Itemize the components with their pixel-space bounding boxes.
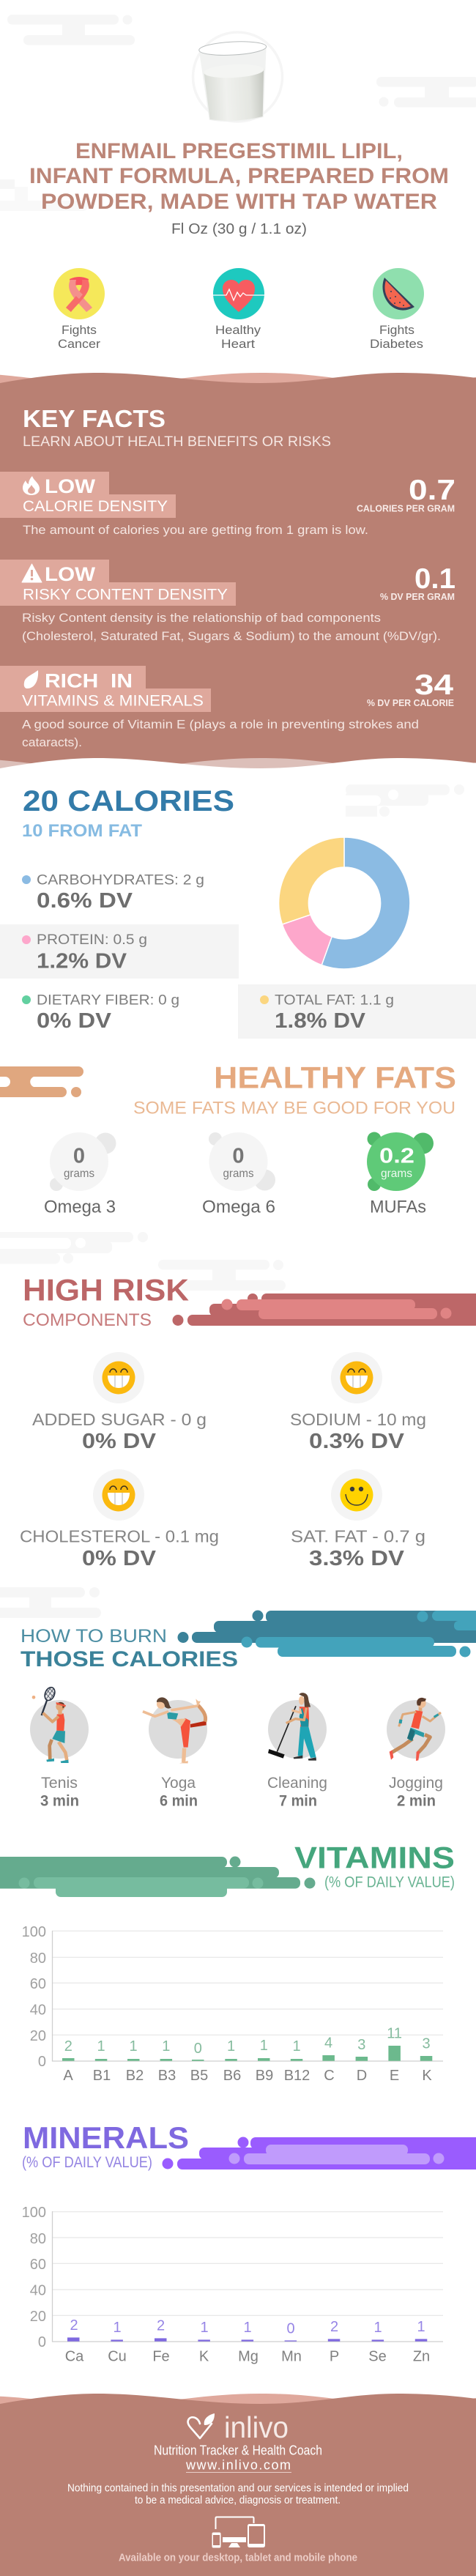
x axis labels: E <box>390 2068 399 2084</box>
bubble: omega 6: Omega 6 <box>202 1198 275 1217</box>
icon: devices <box>212 2517 265 2547</box>
subheading: components: COMPONENTS <box>23 1310 152 1330</box>
x axis labels: Fe <box>152 2348 170 2364</box>
heading: vitamins: VITAMINS <box>294 1841 455 1875</box>
icon: fights cancer <box>53 268 105 319</box>
y axis labels: 60 <box>30 2257 46 2273</box>
y axis labels: 0 <box>38 2334 46 2350</box>
text: calorie density description: The amount of calories you are getting from 1 gram is low. <box>23 524 368 537</box>
bar values: 1 <box>260 2038 268 2054</box>
x axis labels: B3 <box>158 2068 176 2084</box>
bar values <box>64 2026 431 2057</box>
activity: tennis <box>30 1686 89 1763</box>
background cloud: burn <box>0 1587 101 1618</box>
disclaimer: Nothing contained in this presentation and our services is intended or implied <box>67 2482 409 2495</box>
bubble: omega 6: grams <box>223 1168 253 1180</box>
label: yoga <box>160 1775 198 1810</box>
y axis labels: 80 <box>30 1950 46 1967</box>
macro: dietary fiber: DIETARY FIBER: 0 g <box>37 993 179 1009</box>
stat: calories per gram: CALORIES PER GRAM <box>357 502 455 514</box>
x axis labels: B9 <box>256 2068 273 2084</box>
label: tennis: Tenis <box>41 1775 78 1792</box>
bubble: MUFAs <box>367 1132 434 1217</box>
heading: how to burn those calories: THOSE CALORIES <box>21 1647 238 1671</box>
smiley: added sugar <box>93 1352 144 1403</box>
bar values: 1 <box>162 2038 170 2055</box>
title: ENFMAIL PREGESTIMIL LIPIL, <box>75 139 403 163</box>
y axis labels: 100 <box>22 1924 46 1940</box>
macro: carbohydrates: CARBOHYDRATES: 2 g <box>37 873 204 888</box>
text: cholesterol: CHOLESTEROL - 0.1 mg <box>20 1527 219 1546</box>
bubble: MUFAs: grams <box>381 1168 412 1180</box>
logo: inlivo: inlivo <box>224 2410 289 2444</box>
stat: percent DV per gram: 0.1 <box>414 563 455 595</box>
subheading: minerals percent of daily value: (% OF DAILY VALUE) <box>22 2154 152 2171</box>
panel: footer <box>0 2394 476 2576</box>
link: website: www.inlivo.com <box>185 2458 291 2473</box>
smiley: saturated fat <box>331 1469 382 1521</box>
bar values: 1 <box>200 2320 209 2336</box>
caption: availability: Available on your desktop, tablet and mobile phone <box>119 2552 357 2564</box>
activity: jogging <box>387 1698 445 1761</box>
subheading: healthy fats: SOME FATS MAY BE GOOD FOR YOU <box>133 1099 455 1118</box>
badge: rich in vitamins and minerals <box>0 666 211 712</box>
macro: carbohydrates <box>22 873 204 913</box>
text: sodium <box>290 1410 426 1453</box>
bar values <box>70 2317 425 2337</box>
label: yoga: Yoga <box>161 1775 196 1792</box>
y axis labels: 60 <box>30 1976 46 1992</box>
y axis labels: 80 <box>30 2231 46 2247</box>
label: cleaning: Cleaning <box>267 1775 327 1792</box>
panel: key facts <box>0 373 476 787</box>
y axis labels: 20 <box>30 2028 46 2044</box>
smiley: sodium <box>331 1352 382 1403</box>
x axis labels <box>65 2348 430 2364</box>
x axis labels: Zn <box>413 2348 430 2364</box>
banner: healthy fats <box>0 1066 83 1097</box>
label: jogging <box>389 1775 443 1810</box>
bar values: 2 <box>330 2319 338 2335</box>
bars <box>67 2337 427 2342</box>
label: fights cancer <box>58 323 100 351</box>
heading: healthy fats: HEALTHY FATS <box>214 1061 456 1095</box>
bar values: 2 <box>157 2318 165 2334</box>
chart: minerals <box>22 2205 443 2364</box>
subheading: calories from fat: 10 FROM FAT <box>22 821 142 841</box>
label: yoga: 6 min <box>160 1793 198 1810</box>
bar values: 0 <box>194 2041 202 2057</box>
label: jogging: 2 min <box>397 1793 436 1810</box>
y axis labels: 40 <box>30 2282 46 2298</box>
text: sodium: 0.3% DV <box>309 1430 405 1453</box>
x axis labels: Mg <box>238 2348 259 2364</box>
highlight bands for macros <box>0 924 476 1039</box>
x axis labels: A <box>63 2068 73 2084</box>
label: fights diabetes: Fights <box>379 323 414 337</box>
text: added sugar <box>32 1410 207 1453</box>
text: risky content description: Risky Content density is the relationship of bad components <box>22 612 381 625</box>
x axis labels: B5 <box>190 2068 208 2084</box>
bubble: omega 3: Omega 3 <box>44 1198 116 1217</box>
bar values: 1 <box>243 2320 252 2336</box>
background clouds: high risk <box>0 1232 286 1291</box>
x axis labels: B6 <box>223 2068 241 2084</box>
heading: key facts: KEY FACTS <box>23 405 166 432</box>
bar values: 3 <box>357 2037 365 2053</box>
bar values: 1 <box>292 2038 301 2055</box>
y axis labels: 0 <box>38 2054 46 2070</box>
stat: percent DV per calorie <box>367 669 454 708</box>
label: healthy heart: Heart <box>221 337 255 351</box>
macro: protein: 1.2% DV <box>37 950 127 973</box>
activity: cleaning <box>268 1693 327 1761</box>
bubble: omega 3: grams <box>64 1168 94 1180</box>
text: sodium: SODIUM - 10 mg <box>290 1410 426 1429</box>
bubble: omega 6: 0 <box>232 1145 245 1168</box>
label: tennis <box>40 1775 79 1810</box>
icon: fights diabetes <box>373 268 424 319</box>
macro: total fat: TOTAL FAT: 1.1 g <box>275 993 394 1009</box>
stat: percent DV per gram <box>380 563 455 602</box>
badge: low calorie density <box>0 472 176 518</box>
badge: rich in vitamins and minerals: RICH IN <box>45 669 133 691</box>
y axis labels: 20 <box>30 2309 46 2325</box>
heading: minerals: MINERALS <box>23 2120 189 2155</box>
x axis labels: K <box>422 2068 432 2084</box>
badge: low risky content density <box>0 560 236 606</box>
title <box>29 139 449 214</box>
bubble: omega 3: 0 <box>73 1145 85 1168</box>
macro: total fat: 1.8% DV <box>275 1009 366 1033</box>
label: healthy heart: Healthy <box>215 323 261 337</box>
x axis labels: D <box>357 2068 367 2084</box>
badge: low calorie density: LOW <box>45 475 96 497</box>
y axis labels: 100 <box>22 2205 46 2221</box>
tagline: Nutrition Tracker & Health Coach <box>154 2443 322 2458</box>
text: saturated fat: 3.3% DV <box>309 1547 405 1570</box>
activity: yoga <box>143 1697 207 1763</box>
x axis labels: K <box>199 2348 209 2364</box>
label: cleaning: 7 min <box>279 1793 317 1810</box>
y axis labels: 40 <box>30 2002 46 2019</box>
x axis labels: B1 <box>93 2068 111 2084</box>
logo: inlivo <box>188 2410 289 2444</box>
title: POWDER, MADE WITH TAP WATER <box>41 190 437 214</box>
bubble: MUFAs: 0.2 <box>379 1145 414 1168</box>
heading: calories: 20 CALORIES <box>23 785 234 817</box>
bubble: MUFAs: MUFAs <box>370 1198 426 1217</box>
y axis labels <box>22 2205 46 2350</box>
label: jogging: Jogging <box>389 1775 443 1792</box>
bar values: 11 <box>387 2026 402 2042</box>
background clouds: header <box>0 15 476 211</box>
heading: how to burn those calories <box>21 1626 238 1671</box>
y axis labels <box>22 1924 46 2070</box>
label: cleaning <box>267 1775 327 1810</box>
subtitle: serving size: Fl Oz (30 g / 1.1 oz) <box>171 221 307 237</box>
x axis labels: Se <box>368 2348 387 2364</box>
bar values: 1 <box>227 2038 235 2055</box>
macro: carbohydrates: 0.6% DV <box>37 889 133 913</box>
banner: vitamins <box>0 1856 315 1897</box>
label: healthy heart <box>215 323 261 351</box>
smiley: cholesterol <box>93 1469 144 1521</box>
text: added sugar: ADDED SUGAR - 0 g <box>32 1410 207 1429</box>
bar values: 1 <box>97 2038 105 2055</box>
label: fights diabetes <box>370 323 423 351</box>
x axis labels: Cu <box>108 2348 127 2364</box>
bar values: 2 <box>64 2038 72 2055</box>
bar values: 1 <box>417 2319 425 2335</box>
disclaimer: to be a medical advice, diagnosis or treatment. <box>135 2494 341 2506</box>
text: added sugar: 0% DV <box>82 1430 157 1453</box>
label: fights diabetes: Diabetes <box>370 337 423 351</box>
x axis labels: B12 <box>284 2068 310 2084</box>
x axis labels: P <box>330 2348 339 2364</box>
title: INFANT FORMULA, PREPARED FROM <box>29 164 449 188</box>
stat: percent DV per gram: % DV PER GRAM <box>380 591 455 602</box>
macro: dietary fiber <box>22 993 179 1033</box>
background cloud: calories <box>337 784 464 817</box>
badge: low risky content density: LOW <box>45 563 96 585</box>
chart: calorie donut <box>279 837 410 969</box>
x axis labels: C <box>324 2068 335 2084</box>
text: saturated fat <box>291 1527 425 1570</box>
banner: high risk <box>173 1293 476 1326</box>
x axis labels: Mn <box>281 2348 302 2364</box>
macro: dietary fiber: 0% DV <box>37 1009 112 1033</box>
label: fights cancer: Cancer <box>58 337 100 351</box>
bars <box>62 2046 432 2061</box>
stat: calories per gram: 0.7 <box>409 475 455 506</box>
banner: minerals <box>163 2137 476 2169</box>
text: risky content description: (Cholesterol, Saturated Fat, Sugars & Sodium) to the amount (%DV/gr). <box>22 630 441 643</box>
bar values: 1 <box>373 2320 382 2336</box>
stat: percent DV per calorie: % DV PER CALORIE <box>367 697 454 708</box>
stat: calories per gram <box>357 475 455 514</box>
text: vitamins description: cataracts). <box>22 736 82 749</box>
bar values: 1 <box>113 2320 122 2336</box>
text: cholesterol: 0% DV <box>82 1547 157 1570</box>
badge: rich in vitamins and minerals: VITAMINS & MINERALS <box>22 693 204 709</box>
subheading: vitamins percent of daily value: (% OF DAILY VALUE) <box>324 1874 455 1891</box>
stat: percent DV per calorie: 34 <box>414 669 453 701</box>
label: tennis: 3 min <box>40 1793 79 1810</box>
macro: protein <box>22 932 147 973</box>
text: risky content description <box>22 612 441 643</box>
x axis labels: B2 <box>126 2068 144 2084</box>
text: vitamins description <box>22 718 419 749</box>
x axis labels <box>63 2068 432 2084</box>
label: fights cancer: Fights <box>62 323 97 337</box>
x axis labels: Ca <box>65 2348 84 2364</box>
bubble: omega 6 <box>202 1132 275 1217</box>
heading: high risk: HIGH RISK <box>23 1273 189 1307</box>
bar values: 0 <box>286 2321 295 2337</box>
icon: healthy heart <box>213 268 264 319</box>
bar values: 1 <box>129 2038 138 2055</box>
disclaimer <box>67 2482 409 2506</box>
text: vitamins description: A good source of Vitamin E (plays a role in preventing strokes and <box>22 718 419 731</box>
macro: total fat <box>260 993 394 1033</box>
chart: vitamins <box>22 1924 443 2084</box>
bar values: 4 <box>324 2035 332 2051</box>
text: saturated fat: SAT. FAT - 0.7 g <box>291 1527 425 1546</box>
bubble: omega 3 <box>44 1132 116 1217</box>
macro: protein: PROTEIN: 0.5 g <box>37 932 147 948</box>
badge: low risky content density: RISKY CONTENT DENSITY <box>23 586 228 604</box>
badge: low calorie density: CALORIE DENSITY <box>23 498 168 515</box>
header: milk glass photo <box>193 32 283 123</box>
heading: how to burn those calories: HOW TO BURN <box>21 1626 167 1647</box>
bar values: 3 <box>422 2036 431 2052</box>
subheading: key facts: LEARN ABOUT HEALTH BENEFITS OR RISKS <box>23 434 331 450</box>
text: cholesterol <box>20 1527 219 1570</box>
banner: how to burn <box>177 1610 476 1657</box>
bar values: 2 <box>70 2317 78 2334</box>
